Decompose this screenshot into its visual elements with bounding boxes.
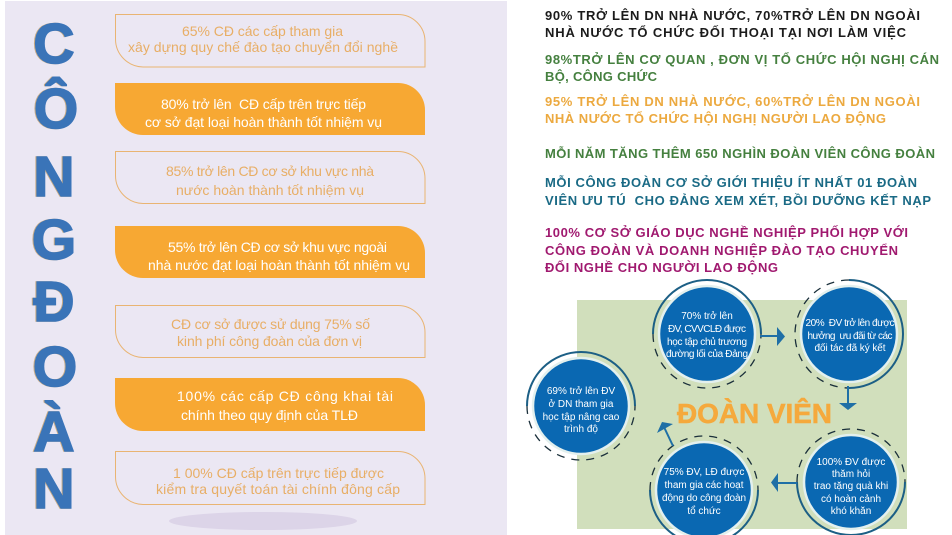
card: 65% quy chế đào tạo: xây dựng quy chế đào tạo chuyển đổi nghề: [128, 39, 398, 55]
panel: green background for đoàn viên diagram: [577, 300, 907, 529]
arrow: left: [771, 473, 797, 492]
text block: đào tạo chuyển đổi nghề: [545, 225, 908, 275]
circle: 70% học tập chủ trương: học tập chủ trương: [667, 336, 747, 348]
circle: 20% ưu đãi: 20% ĐV trở lên được: [806, 317, 894, 329]
circle: 100% thăm hỏi: thăm hỏi: [832, 468, 870, 480]
card: 75% kinh phí công đoàn: CĐ cơ sở được sử dụng 75% số: [171, 316, 370, 332]
card: 100% kiểm tra quyết toán: 1 00% CĐ cấp trên trực tiếp được: [173, 465, 384, 481]
card: 85% khu vực nhà nước: 85% trở lên CĐ cơ sở khu vực nhà: [166, 163, 374, 179]
circle: 69% học tập nâng cao: trình độ: [564, 424, 598, 435]
vertical title: CÔNG ĐOÀN: N: [33, 145, 75, 209]
text block: đối thoại tại nơi làm việc: NHÀ NƯỚC TỔ CHỨC ĐỐI THOẠI TẠI NƠI LÀM VIỆC: [545, 25, 907, 40]
card: 55% khu vực ngoài nhà nước: nhà nước đạt loại hoàn thành tốt nhiệm vụ: [148, 257, 410, 273]
vertical title: CÔNG ĐOÀN: Đ: [33, 270, 75, 334]
card: 65% quy chế đào tạo: [116, 14, 425, 67]
text block: đối thoại tại nơi làm việc: 90% TRỞ LÊN DN NHÀ NƯỚC, 70%TRỞ LÊN DN NGOÀI: [545, 8, 920, 23]
text block: đào tạo chuyển đổi nghề: 100% CƠ SỞ GIÁO DỤC NGHỀ NGHIỆP PHỐI HỢP VỚI: [545, 225, 908, 240]
circle: 69% học tập nâng cao: học tập nâng cao: [543, 412, 620, 423]
card: 80% hoàn thành tốt nhiệm vụ: cơ sở đạt loại hoàn thành tốt nhiệm vụ: [145, 114, 382, 130]
text block: hội nghị cán bộ công chức: 98%TRỞ LÊN CƠ QUAN , ĐƠN VỊ TỔ CHỨC HỘI NGHỊ CÁN: [545, 52, 939, 67]
text block: tăng 650 nghìn đoàn viên: MỖI NĂM TĂNG THÊM 650 NGHÌN ĐOÀN VIÊN CÔNG ĐOÀN: [545, 146, 935, 161]
circle: 75% hoạt động công đoàn: [650, 436, 758, 535]
vertical title: CÔNG ĐOÀN: C: [33, 12, 75, 76]
circle: 20% ưu đãi: đối tác đã ký kết: [814, 342, 886, 354]
text block: giới thiệu đoàn viên ưu tú: MỖI CÔNG ĐOÀN CƠ SỞ GIỚI THIỆU ÍT NHẤT 01 ĐOÀN: [545, 175, 917, 190]
text block: hội nghị người lao động: NHÀ NƯỚC TỔ CHỨC HỘI NGHỊ NGƯỜI LAO ĐỘNG: [545, 111, 886, 126]
circle: 20% ưu đãi: [795, 280, 903, 388]
vertical title: CÔNG ĐOÀN: G: [32, 208, 76, 272]
circle: 20% ưu đãi: hưởng ưu đãi từ các: [808, 330, 892, 342]
card: 85% khu vực nhà nước: [116, 152, 425, 204]
circle: 75% hoạt động công đoàn: động do công đoàn: [662, 493, 746, 504]
card: 100% công khai tài chính: chính theo quy định của TLĐ: [181, 407, 358, 423]
circle: 75% hoạt động công đoàn: tham gia các hoạt: [665, 480, 744, 491]
circle: 75% hoạt động công đoàn: 75% ĐV, LĐ được: [664, 467, 744, 478]
card: 100% công khai tài chính: 100% các cấp CĐ công khai tài: [177, 388, 393, 404]
vertical title: CÔNG ĐOÀN: O: [33, 335, 77, 399]
card: 55% khu vực ngoài nhà nước: 55% trở lên CĐ cơ sở khu vực ngoài: [168, 239, 387, 255]
card: 100% kiểm tra quyết toán: [116, 452, 425, 504]
card: 80% hoàn thành tốt nhiệm vụ: 80% trở lên CĐ cấp trên trực tiếp: [161, 96, 366, 112]
card: 75% kinh phí công đoàn: kinh phí công đoàn của đơn vị: [177, 333, 362, 349]
vertical title: CÔNG ĐOÀN: Ô: [34, 76, 78, 141]
circle: 70% học tập chủ trương: 70% trở lên: [681, 310, 733, 322]
arrow: right: [760, 327, 785, 346]
text block: hội nghị cán bộ công chức: BỘ, CÔNG CHỨC: [545, 69, 658, 84]
circle: 75% hoạt động công đoàn: tổ chức: [687, 505, 721, 517]
card: 100% công khai tài chính: [115, 378, 425, 431]
text block: giới thiệu đoàn viên ưu tú: VIÊN ƯU TÚ CHO ĐẢNG XEM XÉT, BỒI DƯỠNG KẾT NẠP: [545, 193, 931, 208]
circle: 69% học tập nâng cao: 69% trở lên ĐV: [547, 385, 615, 397]
card: 85% khu vực nhà nước: nước hoàn thành tốt nhiệm vụ: [176, 182, 364, 198]
vertical title: CÔNG ĐOÀN: N: [33, 457, 75, 521]
card: 65% quy chế đào tạo: 65% CĐ các cấp tham gia: [182, 23, 343, 39]
circle: 69% học tập nâng cao: [527, 352, 635, 460]
card: 75% kinh phí công đoàn: [116, 306, 425, 358]
circle: 100% thăm hỏi: [797, 429, 905, 535]
card: 100% kiểm tra quyết toán: kiểm tra quyết toán tài chính đông cấp: [156, 481, 400, 497]
text block: hội nghị cán bộ công chức: [545, 52, 939, 84]
circle: 100% thăm hỏi: có hoàn cảnh: [821, 494, 881, 505]
arrow: down: [839, 386, 857, 410]
text block: đào tạo chuyển đổi nghề: CÔNG ĐOÀN VÀ DOANH NGHIỆP ĐÀO TẠO CHUYỂN: [545, 243, 898, 258]
panel: left lilac background: [5, 1, 507, 535]
circle: 70% học tập chủ trương: [653, 280, 761, 388]
text block: hội nghị người lao động: 95% TRỞ LÊN DN NHÀ NƯỚC, 60%TRỞ LÊN DN NGOÀI: [545, 94, 920, 109]
arrow: up-left: [657, 422, 673, 446]
card: 80% hoàn thành tốt nhiệm vụ: [115, 83, 425, 135]
heading: ĐOÀN VIÊN: ĐOÀN VIÊN: [677, 398, 832, 429]
vertical title: CÔNG ĐOÀN: [32, 12, 78, 521]
circle: 100% thăm hỏi: 100% ĐV được: [817, 457, 885, 468]
circle: 100% thăm hỏi: trao tặng quà khi: [814, 481, 888, 492]
circle: 69% học tập nâng cao: ở DN tham gia: [549, 398, 614, 410]
vertical title: CÔNG ĐOÀN: À: [33, 400, 75, 464]
text block: đối thoại tại nơi làm việc: [545, 8, 920, 40]
circle: 70% học tập chủ trương: đường lối của Đảng: [666, 348, 748, 360]
text block: giới thiệu đoàn viên ưu tú: [545, 175, 931, 208]
text block: đào tạo chuyển đổi nghề: ĐỔI NGHỀ CHO NGƯỜI LAO ĐỘNG: [545, 260, 778, 275]
text block: hội nghị người lao động: [545, 94, 920, 126]
decorative shadow ellipse: [169, 512, 357, 530]
circle: 100% thăm hỏi: khó khăn: [831, 506, 871, 517]
circle: 70% học tập chủ trương: ĐV, CVVCLĐ được: [668, 324, 746, 335]
card: 55% khu vực ngoài nhà nước: [115, 226, 425, 278]
